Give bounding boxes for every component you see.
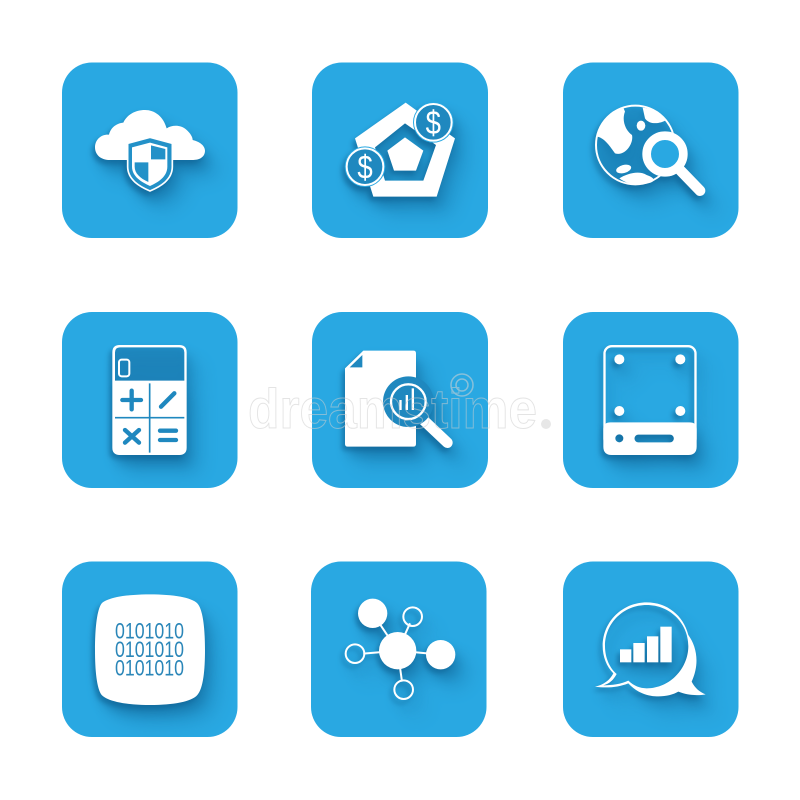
- panel: cloud security: [62, 62, 238, 238]
- icon: speech bubbles with bar chart: [595, 602, 706, 696]
- panel: binary code: [62, 562, 238, 737]
- icon: pentagon with dollar coins: [345, 102, 455, 197]
- panel: molecule network: [311, 562, 486, 737]
- icon: pentagon with dollar coins: $: [357, 149, 373, 186]
- panel: hard drive: [563, 312, 738, 488]
- icon: pentagon with dollar coins: $: [426, 105, 441, 142]
- icon: binary code tile: 0101010: [115, 637, 184, 662]
- watermark: dreamstime: [248, 377, 537, 440]
- panel: finance pentagon: [312, 62, 488, 238]
- icon: globe with magnifier: [596, 106, 700, 191]
- panel: document analysis: [312, 312, 488, 488]
- icon: document with magnifier: [345, 351, 447, 447]
- icon: binary code tile: [95, 594, 205, 705]
- icon: binary code tile: 0101010: [115, 656, 184, 681]
- icon: network nodes: [346, 599, 455, 699]
- icon: hard drive: [603, 346, 697, 455]
- icon: calculator: [112, 345, 187, 455]
- panel: global search: [563, 62, 738, 238]
- icon: binary code tile: 0101010: [115, 618, 184, 643]
- panel: chat with growth chart: [563, 562, 738, 737]
- icon: cloud with shield: [95, 110, 205, 191]
- panel: calculator: [62, 312, 238, 488]
